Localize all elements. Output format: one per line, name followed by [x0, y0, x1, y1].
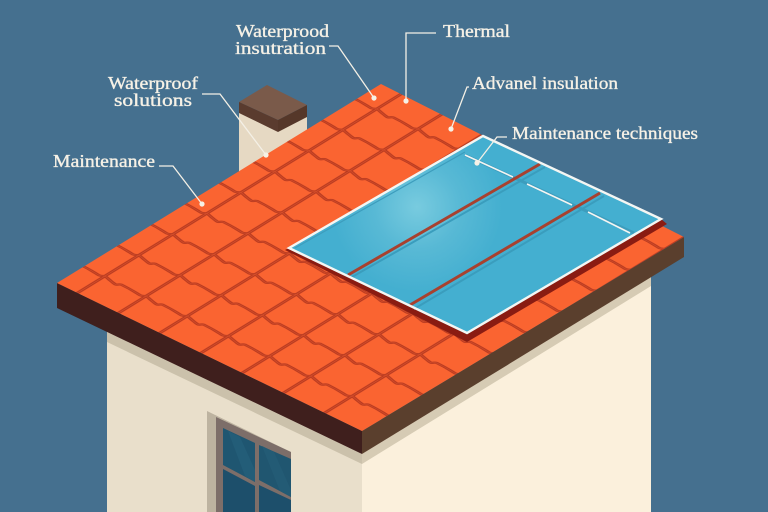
red strips: [348, 164, 600, 305]
right wall: [362, 270, 651, 512]
house walls: [107, 270, 651, 512]
label: Waterprood insutration: insutration: [235, 38, 326, 58]
panel inner bands: [295, 152, 634, 309]
blue solar panel: [285, 136, 667, 342]
label: Waterprood insutration: Waterprood: [236, 21, 329, 41]
label: Maintenance techniques: [474, 123, 698, 166]
panel shadow: [285, 219, 667, 342]
label: Advanel insulation: [448, 73, 618, 132]
label: Maintenance techniques: Maintenance techniques: [512, 123, 698, 143]
label: Thermal: [403, 21, 510, 104]
window panes: [223, 428, 291, 512]
roof fascia: [57, 237, 684, 454]
label: Waterproof solutions: Waterproof: [108, 73, 198, 93]
label: Advanel insulation: Advanel insulation: [472, 73, 618, 93]
label: Waterproof solutions: [108, 73, 269, 158]
white seam: [465, 155, 630, 233]
window: [207, 411, 291, 512]
label: Maintenance: Maintenance: [53, 151, 155, 171]
roof tiles: [57, 84, 684, 431]
chimney: [239, 85, 318, 180]
left wall: [107, 320, 362, 512]
label: Waterproof solutions: solutions: [114, 90, 192, 110]
label: Maintenance: [53, 151, 205, 207]
panel border: [289, 136, 661, 333]
label: Waterprood insutration: [235, 21, 377, 101]
label: Thermal: Thermal: [443, 21, 510, 41]
